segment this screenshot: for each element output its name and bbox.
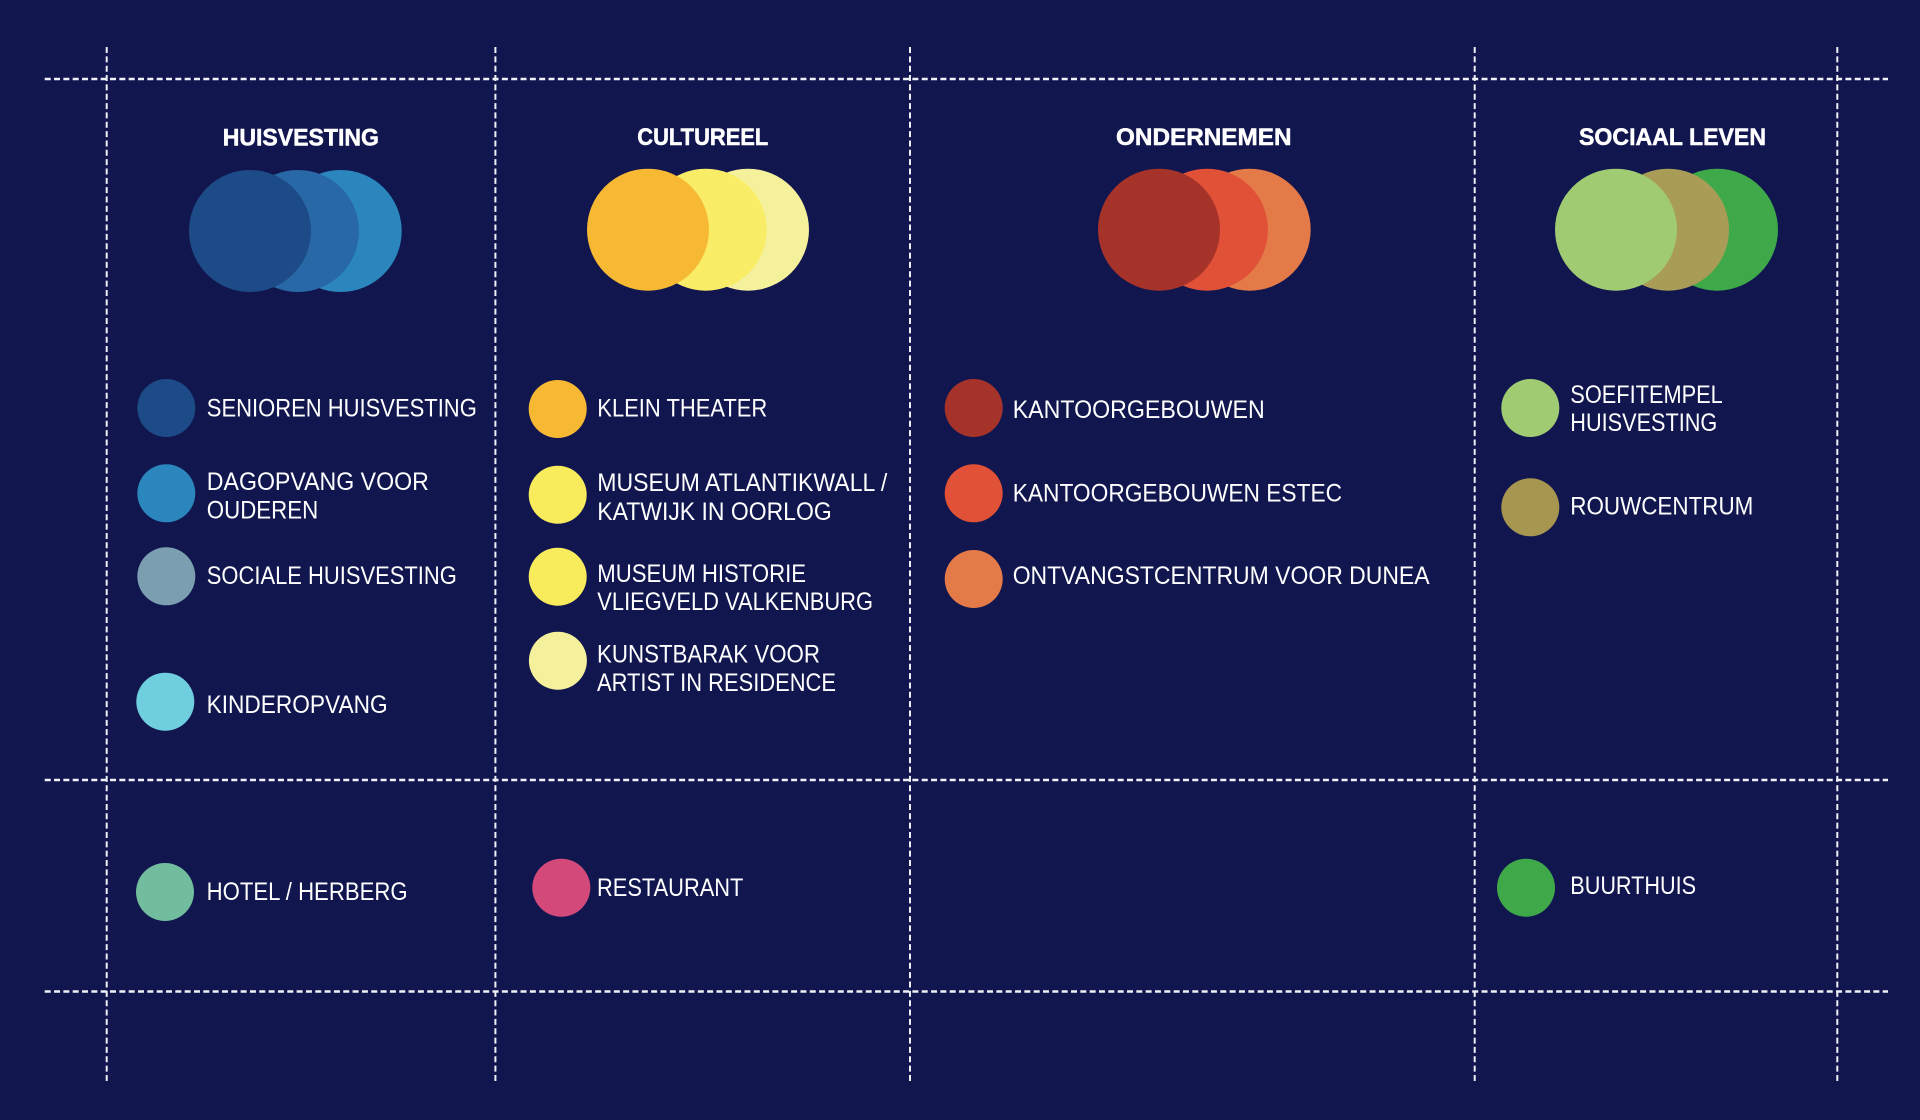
legend item: rouwcentrum — [1501, 478, 1753, 536]
panel: cultureel — [529, 124, 887, 917]
legend item: soefitempel huisvesting: SOEFITEMPEL — [1570, 381, 1723, 409]
icon: overlapping blue circles — [189, 170, 402, 292]
heading: cultureel: CULTUREEL — [637, 124, 768, 151]
legend item: kantoorgebouwen estec: KANTOORGEBOUWEN ESTEC — [1013, 479, 1342, 507]
legend item: kinderopvang: KINDEROPVANG — [207, 691, 388, 719]
legend item: klein theater: KLEIN THEATER — [597, 394, 767, 422]
legend item: sociale huisvesting — [137, 547, 457, 605]
legend item: ontvangstcentrum: ONTVANGSTCENTRUM VOOR DUNEA — [1013, 562, 1430, 590]
legend item: kunstbarak: ARTIST IN RESIDENCE — [597, 669, 836, 697]
legend item: hotel / herberg: HOTEL / HERBERG — [207, 878, 408, 906]
legend item: museum atlantikwall — [529, 466, 887, 526]
icon: overlapping red circles — [1098, 169, 1311, 291]
legend item: senioren huisvesting: SENIOREN HUISVESTING — [207, 395, 477, 423]
legend item: kunstbarak — [529, 632, 836, 697]
legend item: museum historie: MUSEUM HISTORIE — [597, 560, 806, 588]
panel: huisvesting — [136, 124, 477, 921]
legend item: soefitempel huisvesting — [1501, 379, 1723, 437]
legend item: ontvangstcentrum — [945, 550, 1430, 608]
legend item: museum atlantikwall: KATWIJK IN OORLOG — [597, 498, 832, 526]
legend item: kantoorgebouwen: KANTOORGEBOUWEN — [1013, 396, 1265, 424]
heading: huisvesting: HUISVESTING — [223, 124, 379, 151]
legend item: soefitempel huisvesting: HUISVESTING — [1570, 409, 1717, 437]
legend item: dagopvang voor ouderen: DAGOPVANG VOOR — [207, 468, 429, 496]
legend item: kantoorgebouwen estec — [945, 464, 1342, 522]
panel: sociaal leven — [1497, 124, 1778, 917]
legend item: kunstbarak: KUNSTBARAK VOOR — [597, 641, 820, 669]
legend item: buurthuis: BUURTHUIS — [1570, 872, 1696, 900]
legend item: buurthuis — [1497, 859, 1696, 917]
legend item: sociale huisvesting: SOCIALE HUISVESTING — [207, 562, 457, 590]
legend item: kantoorgebouwen — [945, 379, 1265, 437]
legend item: klein theater — [529, 380, 767, 438]
icon: overlapping green circles — [1555, 169, 1778, 291]
legend item: dagopvang voor ouderen: OUDEREN — [207, 496, 318, 524]
icon: overlapping yellow circles — [587, 169, 809, 291]
legend item: restaurant: RESTAURANT — [597, 874, 743, 902]
panel: ondernemen — [945, 124, 1430, 608]
legend item: kinderopvang — [136, 673, 388, 731]
legend item: museum atlantikwall: MUSEUM ATLANTIKWALL / — [597, 469, 887, 497]
legend item: restaurant — [532, 859, 743, 917]
heading: sociaal leven: SOCIAAL LEVEN — [1579, 124, 1766, 151]
legend item: museum historie: VLIEGVELD VALKENBURG — [597, 588, 873, 616]
legend item: senioren huisvesting — [137, 379, 477, 437]
legend item: museum historie — [529, 548, 873, 616]
legend item: rouwcentrum: ROUWCENTRUM — [1570, 492, 1753, 520]
legend item: hotel / herberg — [136, 863, 408, 921]
heading: ondernemen: ONDERNEMEN — [1116, 124, 1292, 151]
legend item: dagopvang voor ouderen — [137, 464, 429, 524]
